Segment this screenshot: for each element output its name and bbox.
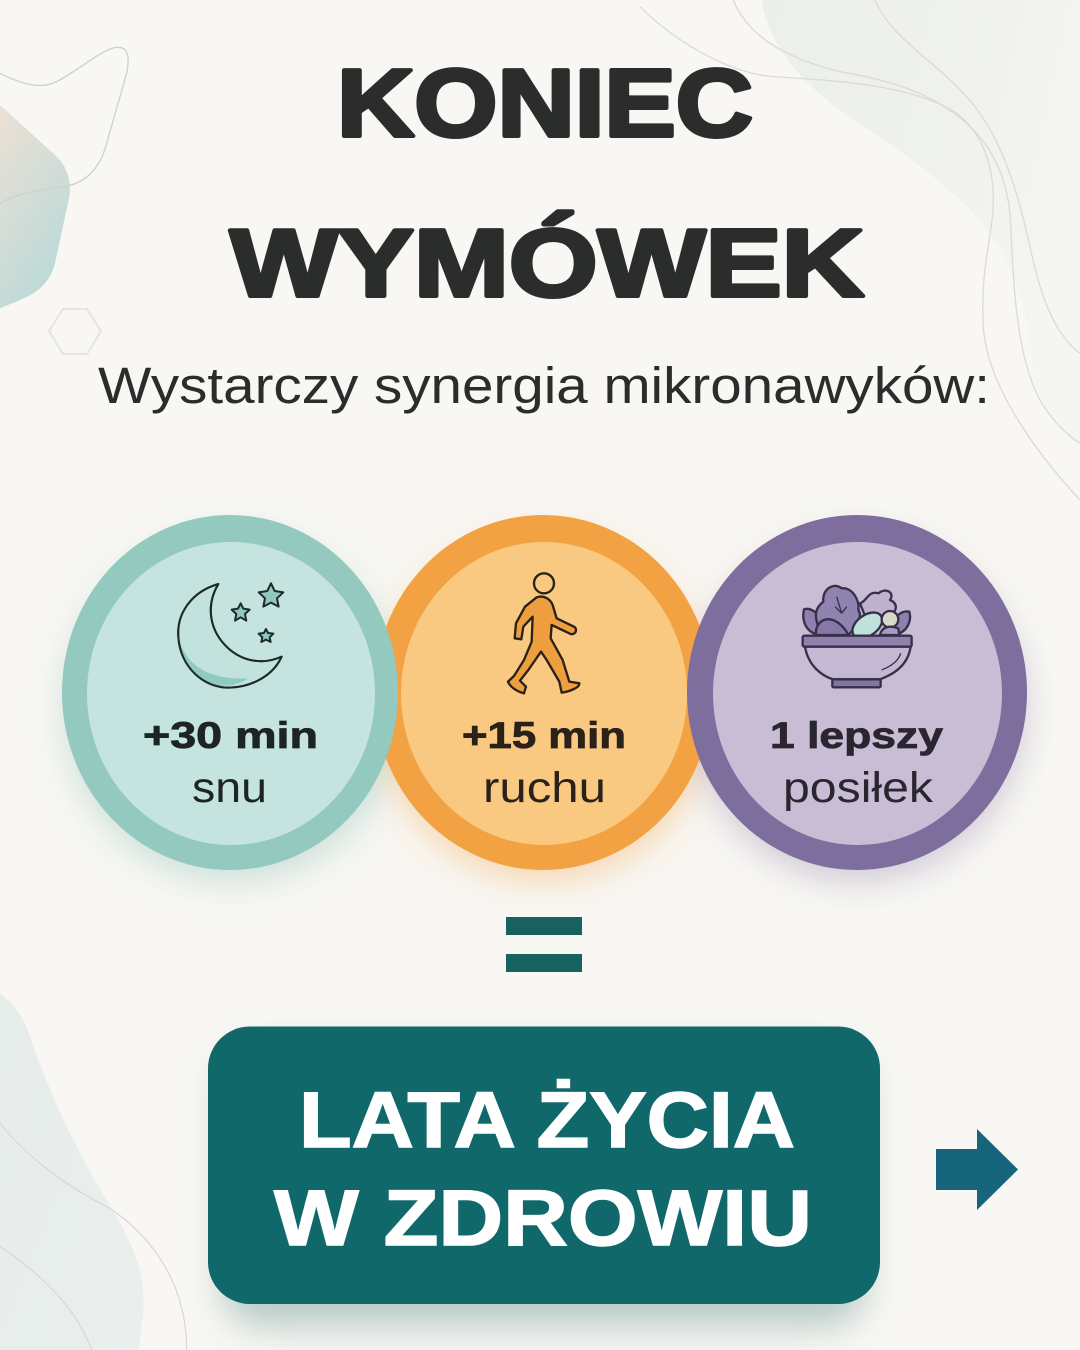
arrow	[936, 1129, 1018, 1210]
result button shadow	[222, 1050, 866, 1326]
label: +30 min snu: snu	[192, 764, 267, 812]
label: +30 min snu: +30 min	[143, 715, 318, 756]
panel: snu (teal circle)	[62, 515, 398, 870]
icon: salad bowl	[803, 586, 912, 687]
icon: walking person	[508, 573, 579, 693]
result text: LATA ŻYCIA	[299, 1075, 795, 1164]
label: 1 lepszy posiłek: posiłek	[783, 764, 934, 812]
panel: posiłek (purple circle)	[687, 515, 1027, 870]
background decoration: hexagon outline	[49, 309, 101, 354]
label: 1 lepszy posiłek: 1 lepszy	[770, 715, 943, 756]
title: KONIEC	[337, 50, 753, 157]
label: +30 min snu	[143, 715, 318, 812]
icon: equals sign	[506, 917, 582, 972]
label: +15 min ruchu	[462, 715, 626, 812]
result text: W ZDROWIU	[274, 1173, 812, 1262]
circle shadows	[66, 536, 1024, 880]
background decoration: bottom left wave	[0, 993, 187, 1350]
result text	[274, 1075, 812, 1262]
subtitle: Wystarczy synergia mikronawyków:	[98, 357, 990, 414]
background decoration: top right wave	[640, 0, 1080, 500]
icon: moon and stars	[178, 583, 283, 688]
panel: result button	[208, 1026, 880, 1304]
background decoration: top left blob	[0, 47, 128, 308]
title	[230, 50, 864, 317]
label: +15 min ruchu: ruchu	[483, 764, 606, 812]
label: 1 lepszy posiłek	[770, 715, 943, 812]
label: +15 min ruchu: +15 min	[462, 715, 626, 756]
title: WYMÓWEK	[230, 210, 864, 317]
panel: ruchu (orange circle)	[374, 515, 712, 870]
